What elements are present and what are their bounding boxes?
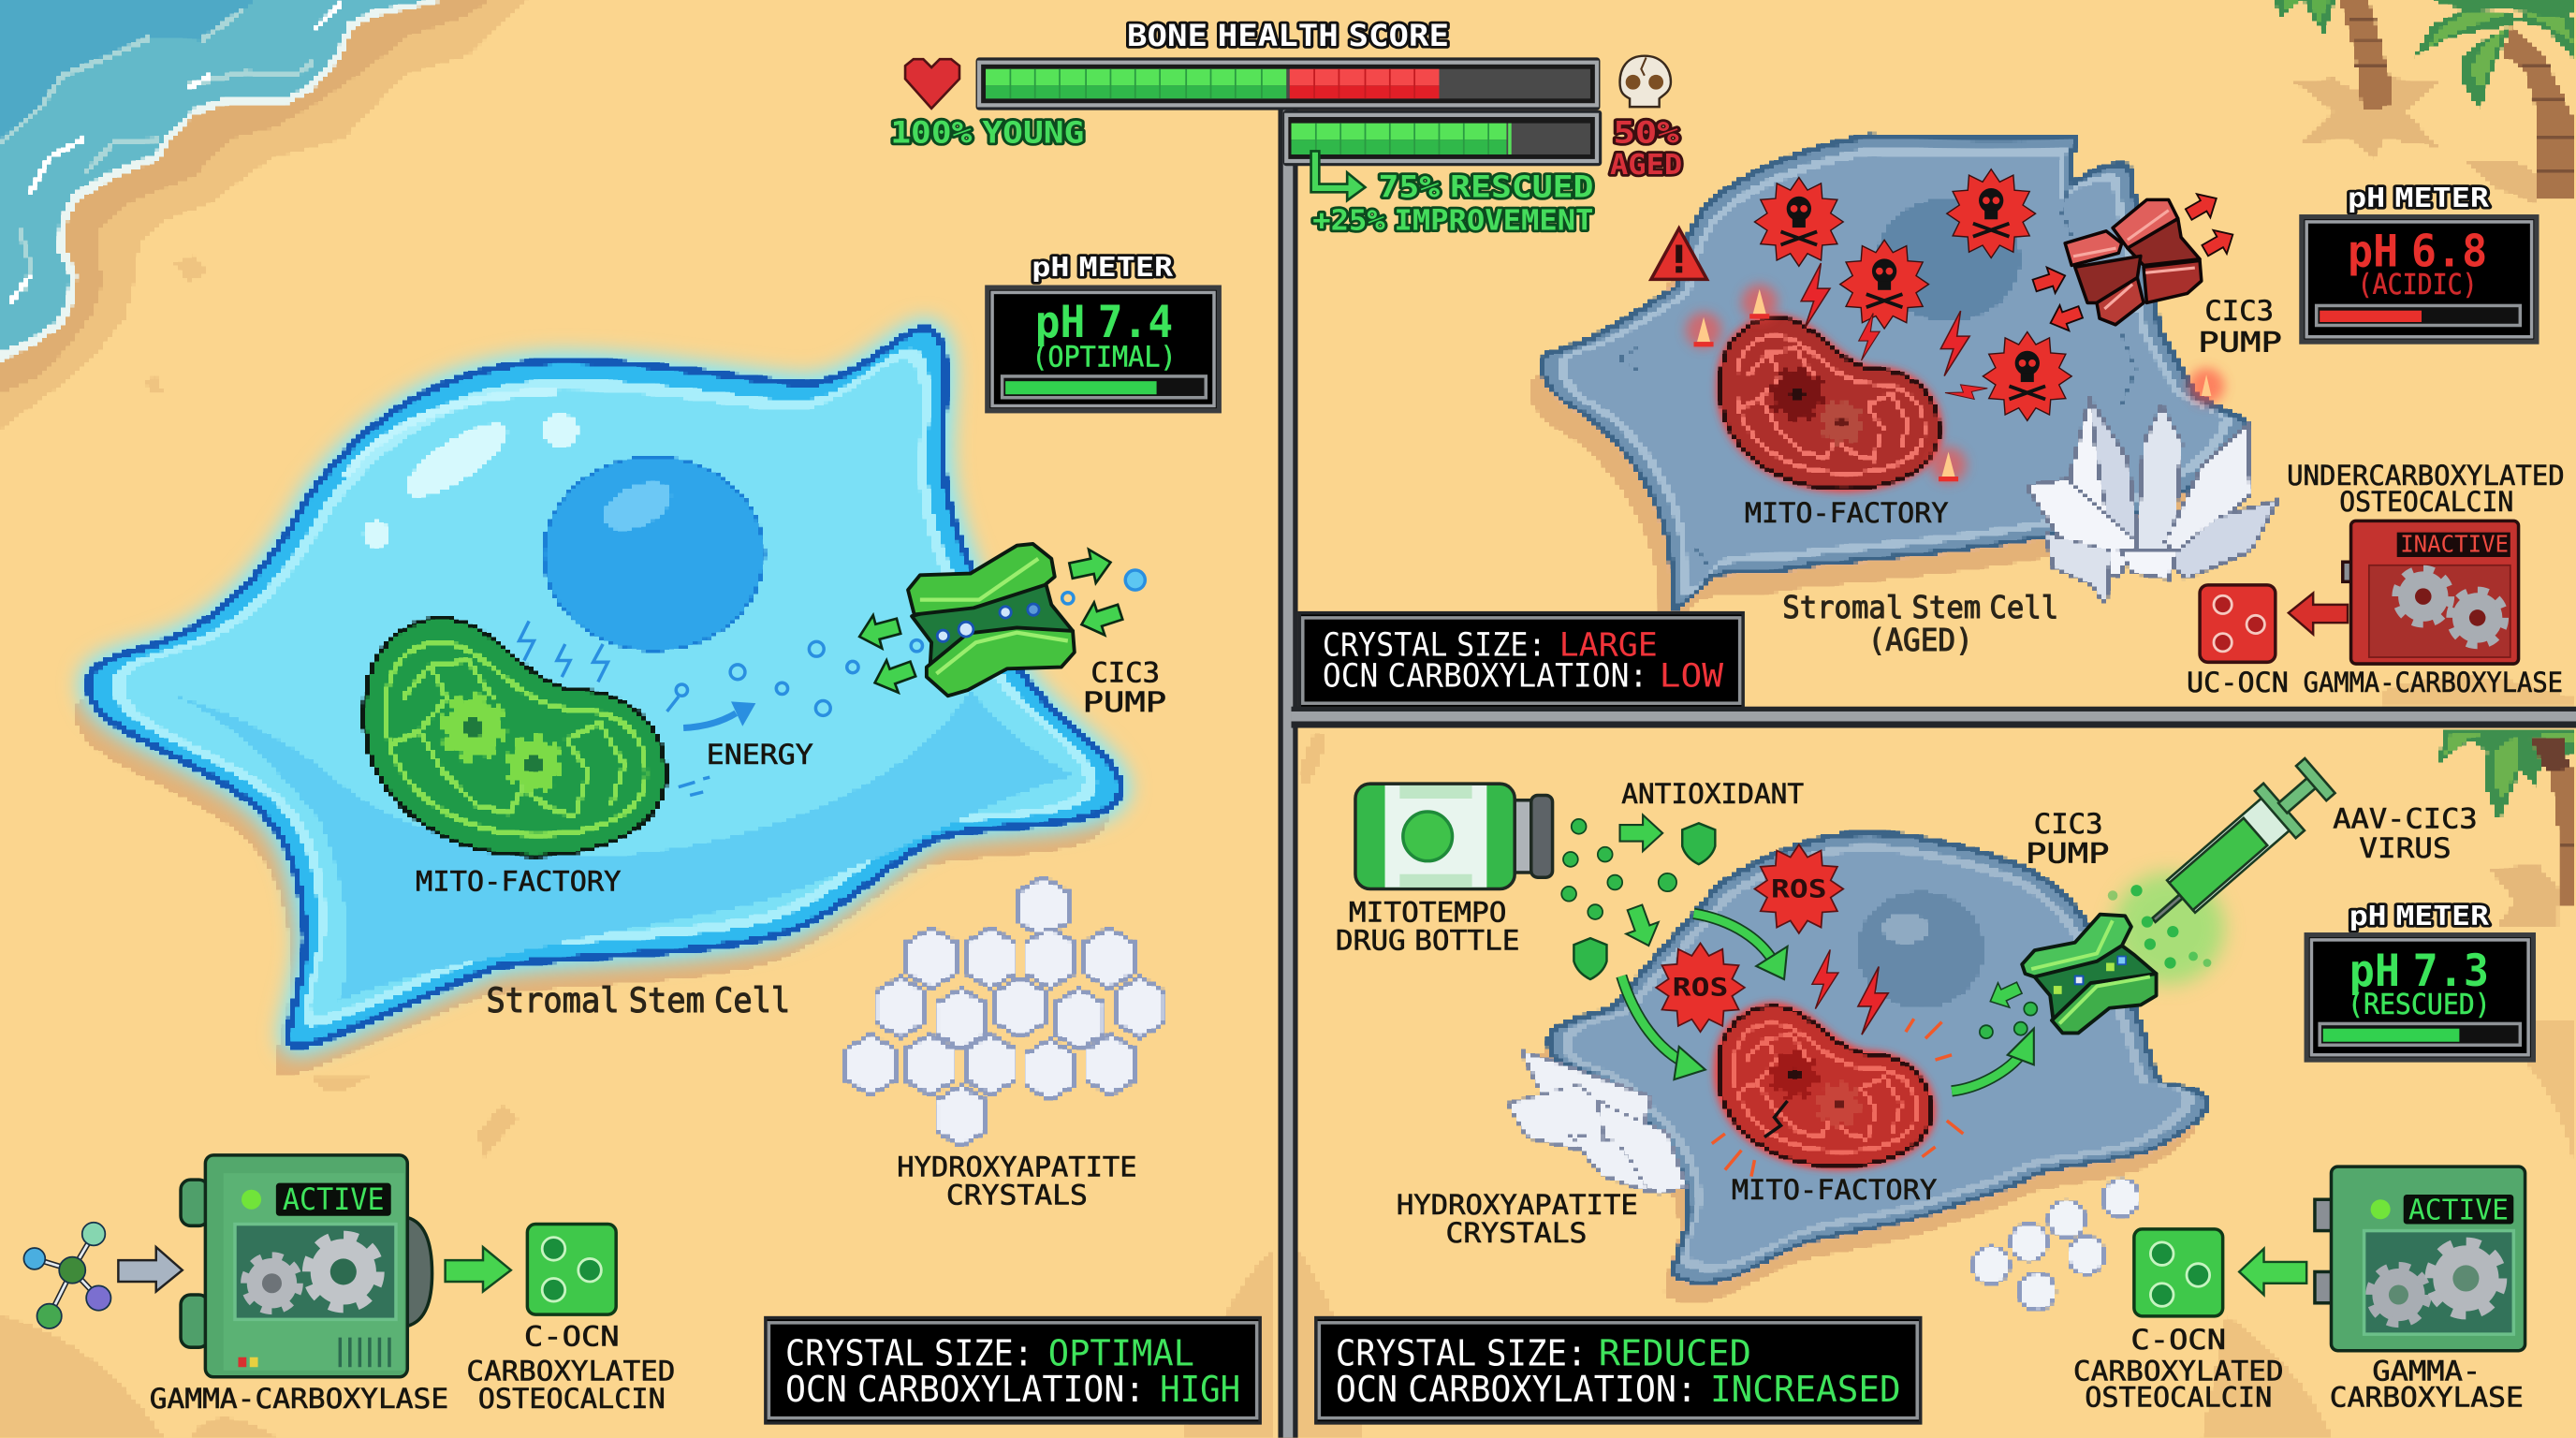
panel: aged cell xyxy=(1530,137,2565,698)
pH meter: optimal: (OPTIMAL) xyxy=(1032,341,1177,374)
labels: rescued cell: AAV-CIC3 xyxy=(2333,803,2478,835)
labels: score: AGED xyxy=(1610,149,1682,182)
labels: rescued cell: GAMMA- xyxy=(2372,1355,2481,1387)
curved green arrows xyxy=(1621,914,2021,1091)
labels: aged cell: GAMMA-CARBOXYLASE xyxy=(2304,667,2563,698)
pH meter: rescued: (RESCUED) xyxy=(2348,989,2491,1021)
labels: rescued cell: PUMP xyxy=(2026,837,2110,869)
panel: young healthy cell xyxy=(76,329,1166,1076)
aged cell body xyxy=(1530,137,2247,631)
ROS text xyxy=(1673,875,1827,1003)
labels: young cell: Stromal Stem Cell xyxy=(487,980,790,1020)
machine status text: ACTIVE xyxy=(2408,1194,2509,1226)
hydroxyapatite crystals: optimal lattice: CRYSTALS xyxy=(946,1179,1088,1211)
labels: rescued cell: DRUG BOTTLE xyxy=(1336,924,1519,956)
status box: young: OPTIMAL xyxy=(1048,1332,1194,1374)
antioxidant particles xyxy=(1561,819,2037,1038)
cell glow xyxy=(89,329,1120,1046)
labels: rescued cell: OSTEOCALCIN xyxy=(2085,1381,2272,1413)
labels: score xyxy=(890,117,1682,238)
panel: rescued cell xyxy=(1336,752,2525,1413)
status box: young: OCN CARBOXYLATION: xyxy=(785,1369,1145,1411)
status box: aged xyxy=(1299,613,1743,708)
hydroxyapatite crystals: optimal lattice: HYDROXYAPATITE xyxy=(897,1152,1137,1183)
arrow: green output xyxy=(446,1247,511,1292)
arrow: rescue elbow xyxy=(1311,151,1365,200)
labels: rescued cell: C-OCN xyxy=(2130,1324,2226,1356)
labels: young cell: CIC3 xyxy=(1090,656,1160,688)
arrow heads and flow xyxy=(1618,815,2034,1079)
arrow: red xyxy=(2289,594,2348,634)
arrows: pump flow xyxy=(855,546,1125,699)
labels: conversion: C-OCN xyxy=(524,1320,620,1352)
icon: active machine xyxy=(2315,1167,2525,1351)
labels: aged cell: OSTEOCALCIN xyxy=(2339,486,2513,518)
status box: young: CRYSTAL SIZE: xyxy=(785,1332,1033,1374)
labels: conversion: CARBOXYLATED xyxy=(466,1355,675,1387)
machine status text: ACTIVE xyxy=(283,1183,385,1217)
arrow: green left xyxy=(2239,1249,2306,1295)
reduced round crystals xyxy=(1973,1180,2139,1310)
ROS text: ROS xyxy=(1673,975,1728,1003)
labels: rescued cell: HYDROXYAPATITE xyxy=(1397,1189,1638,1221)
labels: young cell: MITO-FACTORY xyxy=(416,865,621,897)
pH meter: optimal xyxy=(988,252,1219,411)
labels: aged cell: CIC3 xyxy=(2204,295,2274,327)
labels: rescued cell: CIC3 xyxy=(2034,808,2103,840)
labels: aged cell: PUMP xyxy=(2198,327,2282,359)
HUD: bone health score xyxy=(890,20,1682,238)
labels: rescued cell: CARBOXYLASE xyxy=(2330,1381,2524,1413)
labels: score: 50% xyxy=(1614,117,1679,151)
damage bolts xyxy=(1801,263,1989,408)
pH meter: rescued: pH 7.3 xyxy=(2349,946,2489,997)
icons: shields xyxy=(1573,823,1715,979)
status box: young xyxy=(766,1318,1260,1423)
labels: rescued cell: MITO-FACTORY xyxy=(1732,1174,1937,1206)
icon: heart xyxy=(905,59,959,109)
icon: C-OCN block xyxy=(2134,1229,2223,1316)
status box: young: HIGH xyxy=(1160,1369,1240,1411)
icon: mitotempo drug bottle xyxy=(1355,784,1553,889)
icon: ClC3 pump xyxy=(908,544,1075,696)
pH meter: acidic xyxy=(2302,183,2537,342)
labels: rescued cell: VIRUS xyxy=(2359,832,2452,864)
arrow: energy xyxy=(731,701,755,726)
icon: inactive machine xyxy=(2343,521,2519,664)
curved green arrow fill xyxy=(1621,914,2021,1091)
status box: aged: LOW xyxy=(1660,657,1724,696)
arrows: acid flow xyxy=(2030,186,2240,336)
ROS text: ROS xyxy=(1771,875,1827,903)
bar: young vs aged xyxy=(976,57,1600,110)
wing crystals xyxy=(1508,1051,1686,1193)
labels: aged cell: MITO-FACTORY xyxy=(1745,497,1949,529)
rescued cell body xyxy=(1540,834,2206,1302)
title: BONE HEALTH SCORE xyxy=(1127,20,1449,53)
labels: conversion xyxy=(150,1320,675,1415)
pH meter: rescued xyxy=(2306,901,2533,1060)
labels: rescued cell: CRYSTALS xyxy=(1445,1217,1587,1249)
pH meter: acidic: (ACIDIC) xyxy=(2358,269,2478,301)
labels: score: 100% YOUNG xyxy=(890,117,1084,151)
labels: rescued cell: CARBOXYLATED xyxy=(2073,1355,2284,1387)
large crystals xyxy=(2027,399,2277,603)
pH meter: rescued: pH METER xyxy=(2349,901,2489,932)
labels: conversion: OSTEOCALCIN xyxy=(478,1383,666,1415)
status box: aged: LARGE xyxy=(1559,625,1658,664)
hydroxyapatite crystals: optimal lattice xyxy=(846,877,1164,1211)
aged mitochondrion xyxy=(1720,318,1939,489)
status box: rescued: INCREASED xyxy=(1710,1369,1901,1411)
labels: aged cell: UC-OCN xyxy=(2187,667,2289,698)
damage bolts xyxy=(1812,949,1888,1034)
labels: young cell: PUMP xyxy=(1083,686,1166,718)
icon: active machine xyxy=(181,1155,432,1377)
labels: aged cell: UNDERCARBOXYLATED xyxy=(2287,460,2565,492)
status box: rescued: OCN CARBOXYLATION: xyxy=(1336,1369,1697,1411)
icon: syringe virus xyxy=(2108,752,2340,984)
machine status text: INACTIVE xyxy=(2400,531,2509,558)
rescued mitochondrion xyxy=(1712,1007,1963,1177)
bar: rescued xyxy=(1283,110,1602,166)
icon: rescued ClC3 pump xyxy=(2022,915,2157,1033)
alarm lights xyxy=(1686,285,2224,483)
panel: gamma-carboxylase conversion (young) xyxy=(23,1155,675,1415)
icon: C-OCN block xyxy=(527,1225,616,1314)
labels: young cell: ENERGY xyxy=(707,739,813,770)
energy bolts and ion particles xyxy=(520,570,1145,795)
divider: vertical and horizontal panel frame xyxy=(1278,107,2576,1438)
ROS bursts with skulls xyxy=(1754,169,2071,420)
labels: rescued cell: ANTIOXIDANT xyxy=(1621,778,1804,810)
labels: young cell xyxy=(416,656,1166,1020)
icon: molecule xyxy=(23,1223,110,1328)
status box: aged: CRYSTAL SIZE: xyxy=(1323,625,1546,664)
labels: aged cell xyxy=(1745,295,2565,698)
icon: warning triangle xyxy=(1651,228,1707,279)
status box: rescued: CRYSTAL SIZE: xyxy=(1336,1332,1587,1374)
status box: aged: OCN CARBOXYLATION: xyxy=(1323,657,1647,696)
status box: rescued xyxy=(1316,1318,1921,1423)
icon: UC-OCN block xyxy=(2200,585,2276,662)
labels: score: 75% RESCUED xyxy=(1379,171,1593,205)
cell body with nucleus and mitochondrion xyxy=(89,329,1120,1046)
pH meter: acidic: pH METER xyxy=(2348,183,2489,213)
status box: rescued: REDUCED xyxy=(1599,1332,1751,1374)
labels: rescued cell xyxy=(1336,778,2524,1413)
labels: conversion: GAMMA-CARBOXYLASE xyxy=(150,1383,448,1415)
labels: aged cell: (AGED) xyxy=(1868,622,1973,658)
labels: rescued cell: MITOTEMPO xyxy=(1349,897,1506,929)
ROS bursts xyxy=(1656,844,1843,1032)
labels: score: +25% IMPROVEMENT xyxy=(1312,205,1593,238)
icon: broken ClC3 pump xyxy=(2065,199,2202,325)
panel: inactive machine xyxy=(2200,521,2519,664)
pH meter: optimal: pH 7.4 xyxy=(1035,297,1173,348)
labels: aged cell: Stromal Stem Cell xyxy=(1782,589,2058,625)
arrow: gray input xyxy=(118,1247,183,1292)
icon: skull xyxy=(1620,56,1671,107)
pH meter: acidic: pH 6.8 xyxy=(2348,226,2487,277)
pH meter: optimal: pH METER xyxy=(1032,252,1173,283)
